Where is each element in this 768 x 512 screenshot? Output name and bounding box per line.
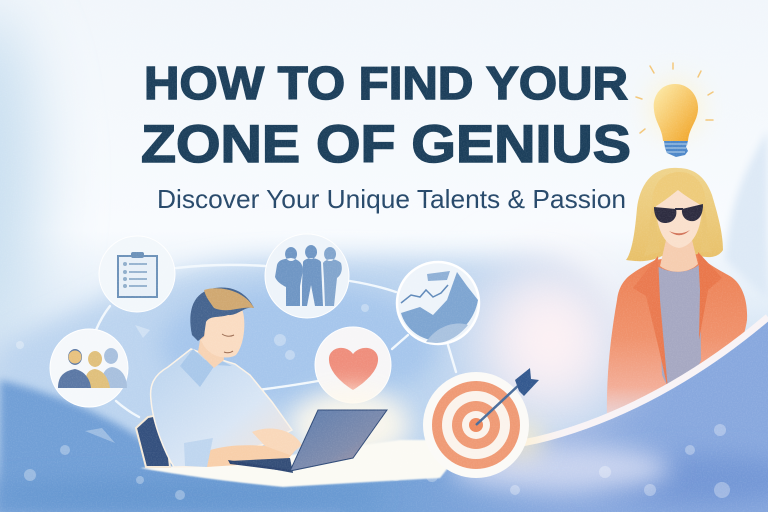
- mountain with flag and line: [401, 272, 478, 341]
- lapels: [633, 256, 668, 390]
- coat: [607, 254, 747, 420]
- collar: [180, 349, 232, 387]
- desk: [140, 440, 470, 487]
- clipboard: [118, 252, 157, 297]
- neck: [198, 340, 224, 368]
- face: [196, 300, 244, 358]
- subtitle: Discover Your Unique Talents & Passion: [157, 184, 626, 214]
- panel: team silhouettes icon: [265, 234, 349, 318]
- grey t-shirt: [658, 265, 701, 384]
- chair: [136, 414, 170, 467]
- bokeh dots: [16, 304, 730, 500]
- shirt: [151, 349, 292, 467]
- arrow: [476, 368, 539, 425]
- neck: [660, 240, 698, 272]
- forearm: [205, 445, 294, 467]
- woman with sunglasses: [607, 168, 747, 420]
- heart: [329, 348, 378, 390]
- hair back: [626, 168, 723, 261]
- swoosh curve: [470, 317, 768, 449]
- face: [656, 188, 702, 248]
- target rings: [432, 381, 520, 469]
- silhouettes: [275, 245, 342, 306]
- panel: mountain and chart icon: [397, 262, 479, 344]
- mouth: [669, 230, 690, 235]
- title: HOW TO FIND YOUR: [144, 57, 628, 109]
- front hair: [652, 172, 706, 208]
- panel: target icon: [423, 368, 545, 478]
- laptop: [229, 458, 293, 473]
- title: [141, 57, 631, 174]
- panel: people group icon: [50, 329, 128, 407]
- panel: heart icon: [315, 327, 391, 403]
- panel: man at laptop: [136, 287, 470, 487]
- panel: clipboard icon: [99, 236, 175, 312]
- three people: [58, 348, 127, 388]
- connecting network lines: [96, 265, 456, 417]
- sunglasses: [654, 204, 703, 223]
- title: ZONE OF GENIUS: [141, 115, 631, 174]
- icon: lightbulb: [636, 63, 713, 157]
- eye and smile: [222, 334, 234, 353]
- hair: [190, 287, 254, 341]
